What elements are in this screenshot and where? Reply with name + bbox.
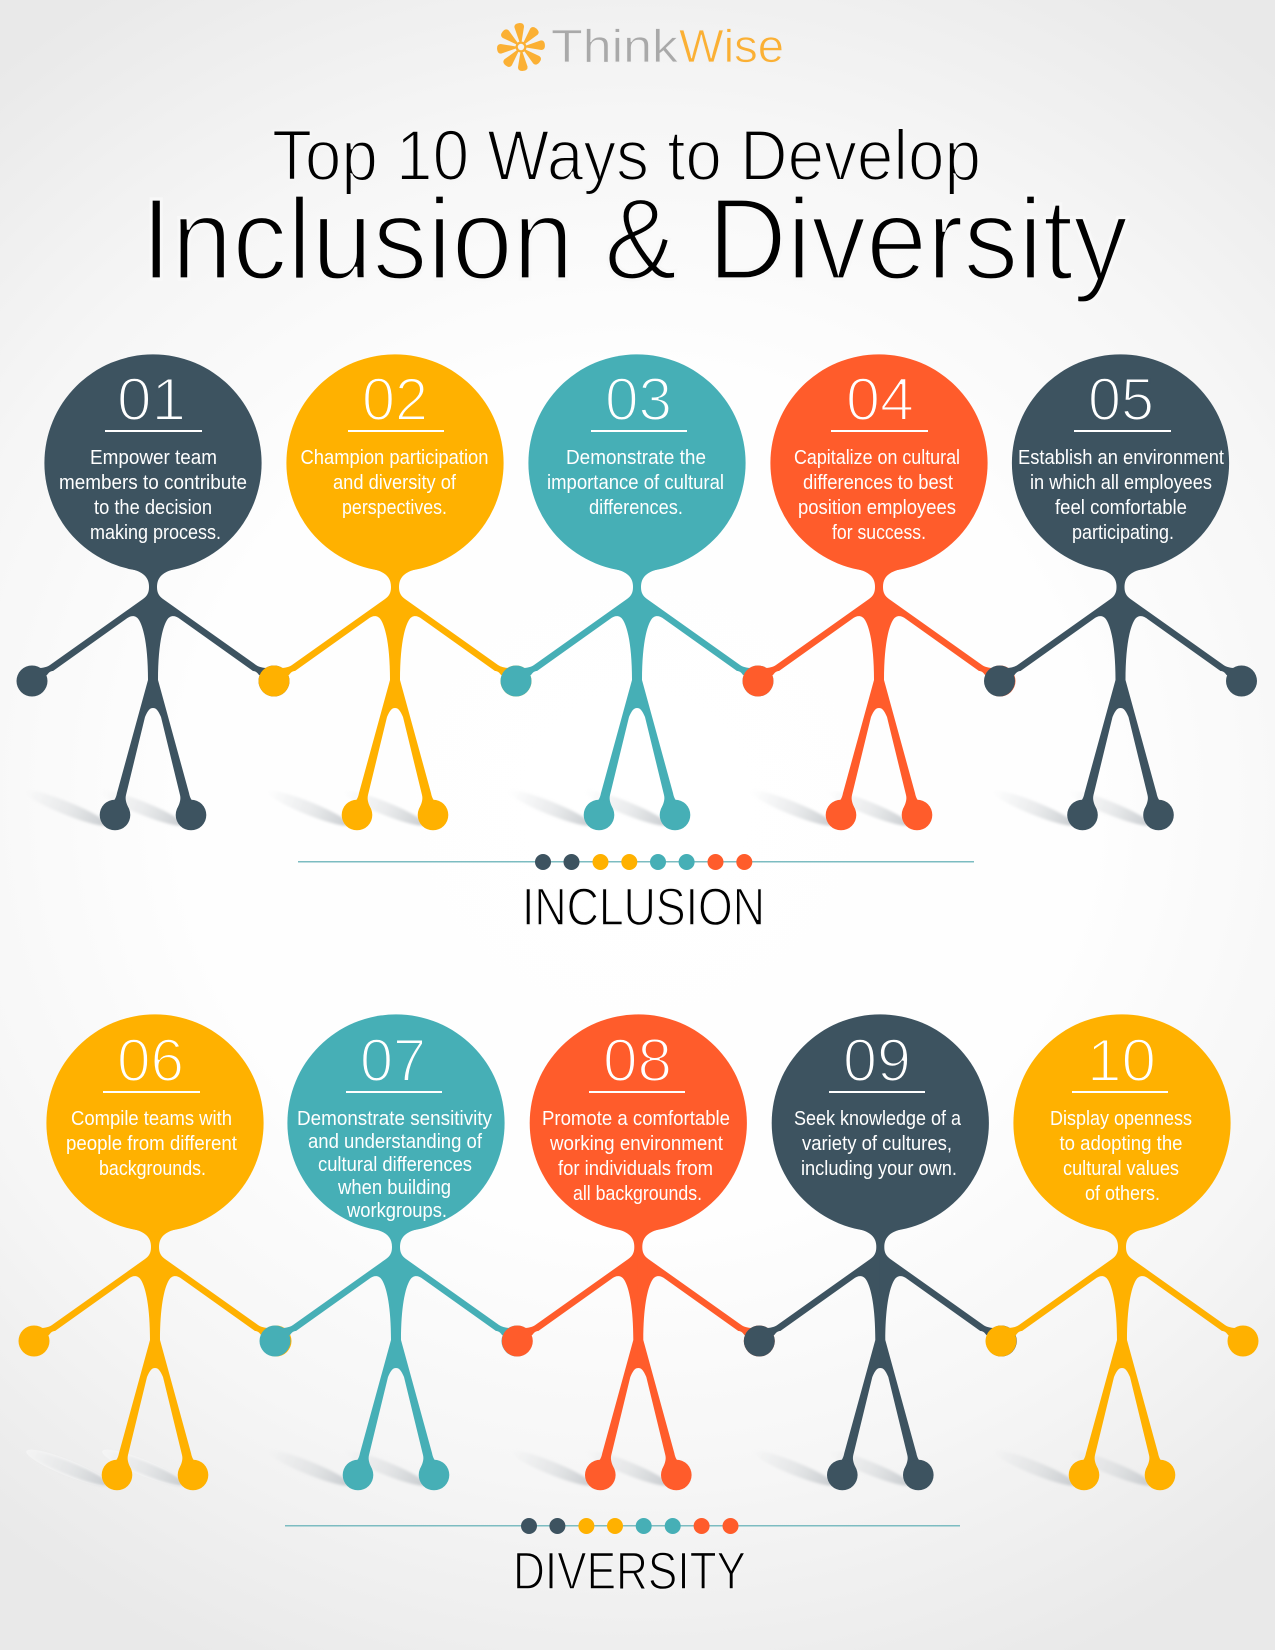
figure 02 [258, 354, 532, 831]
description: workgroups. [346, 1199, 447, 1222]
description: Demonstrate sensitivity [297, 1107, 493, 1130]
underline [1072, 1091, 1168, 1093]
figure 08 [502, 1014, 775, 1491]
underline [103, 1091, 200, 1093]
description: members to contribute [59, 471, 247, 494]
description: to adopting the [1060, 1132, 1182, 1155]
number 07: 07 [360, 1027, 426, 1094]
underline [346, 1091, 442, 1093]
description: working environment [549, 1132, 723, 1155]
number 06: 06 [117, 1027, 184, 1094]
description: all backgrounds. [573, 1182, 702, 1205]
number 01: 01 [117, 366, 186, 433]
underline [1074, 430, 1171, 432]
description: Demonstrate the [566, 446, 706, 469]
description: Promote a comfortable [542, 1107, 730, 1130]
item 08 text [542, 1027, 730, 1205]
description: for success. [832, 521, 926, 544]
logo: ThinkWise [497, 20, 784, 72]
item 01 text [59, 366, 247, 544]
icon: logo flower [497, 23, 545, 71]
description: of others. [1085, 1182, 1160, 1205]
description: to the decision [94, 496, 212, 519]
figure 06 [18, 1014, 292, 1491]
figure 01 [16, 354, 290, 831]
description: when building [337, 1176, 451, 1199]
description: for individuals from [558, 1157, 713, 1180]
logo wordmark: Wise: Wise [679, 20, 784, 72]
description [1018, 446, 1224, 544]
description: differences to best [803, 471, 953, 494]
heading: INCLUSION: INCLUSION [522, 878, 765, 937]
description [547, 446, 724, 519]
description: Establish an environment [1018, 446, 1224, 469]
description: variety of cultures, [802, 1132, 952, 1155]
description: Display openness [1050, 1107, 1192, 1130]
description: cultural values [1063, 1157, 1179, 1180]
item 07 text [297, 1027, 493, 1222]
description: people from different [66, 1132, 237, 1155]
item 04 text [794, 366, 960, 544]
underline [348, 430, 444, 432]
description: cultural differences [318, 1153, 472, 1176]
description: position employees [798, 496, 956, 519]
item 02 text [300, 366, 488, 519]
description [66, 1107, 237, 1180]
logo wordmark: Think: Think [551, 20, 679, 72]
divider: inclusion [298, 854, 974, 870]
heading: DIVERSITY: DIVERSITY [513, 1542, 746, 1601]
description: differences. [589, 496, 683, 519]
number 02: 02 [362, 366, 428, 433]
description: perspectives. [342, 496, 447, 519]
underline [831, 430, 928, 432]
description: Champion participation [300, 446, 488, 469]
item 10 text [1050, 1027, 1192, 1205]
description: participating. [1072, 521, 1174, 544]
title line 1: Top 10 Ways to Develop [272, 117, 981, 196]
underline [105, 430, 202, 432]
figure 04 [742, 354, 1016, 831]
description: feel comfortable [1055, 496, 1187, 519]
description: including your own. [801, 1157, 957, 1180]
description: in which all employees [1030, 471, 1212, 494]
underline [829, 1091, 925, 1093]
description [542, 1107, 730, 1205]
description: Compile teams with [71, 1107, 232, 1130]
figure 07 [260, 1014, 532, 1491]
description: making process. [90, 521, 221, 544]
number 09: 09 [843, 1027, 911, 1094]
item 03 text [547, 366, 724, 519]
divider: diversity [285, 1518, 960, 1534]
description: and diversity of [333, 471, 456, 494]
figure 05 [984, 354, 1257, 831]
number 10: 10 [1087, 1027, 1156, 1094]
figure 03 [500, 354, 774, 831]
description: importance of cultural [547, 471, 724, 494]
description [1050, 1107, 1192, 1205]
underline [591, 430, 687, 432]
item 06 text [66, 1027, 237, 1180]
description: Seek knowledge of a [794, 1107, 962, 1130]
description: backgrounds. [99, 1157, 206, 1180]
underline [589, 1091, 685, 1093]
description [59, 446, 247, 544]
description [794, 446, 960, 544]
shadow glint: figure 06 [23, 1444, 189, 1492]
description: and understanding of [308, 1130, 482, 1153]
description: Empower team [90, 446, 217, 469]
title [141, 117, 1128, 304]
description [300, 446, 488, 519]
description: Capitalize on cultural [794, 446, 960, 469]
title line 2: Inclusion & Diversity [141, 174, 1128, 304]
item 09 text [794, 1027, 962, 1180]
description [297, 1107, 493, 1222]
item 05 text [1018, 366, 1224, 544]
figure 09 [744, 1014, 1017, 1491]
description [794, 1107, 962, 1180]
figure 10 [986, 1014, 1258, 1491]
number 03: 03 [605, 366, 672, 433]
number 08: 08 [603, 1027, 672, 1094]
number 04: 04 [846, 366, 914, 433]
number 05: 05 [1088, 366, 1154, 433]
